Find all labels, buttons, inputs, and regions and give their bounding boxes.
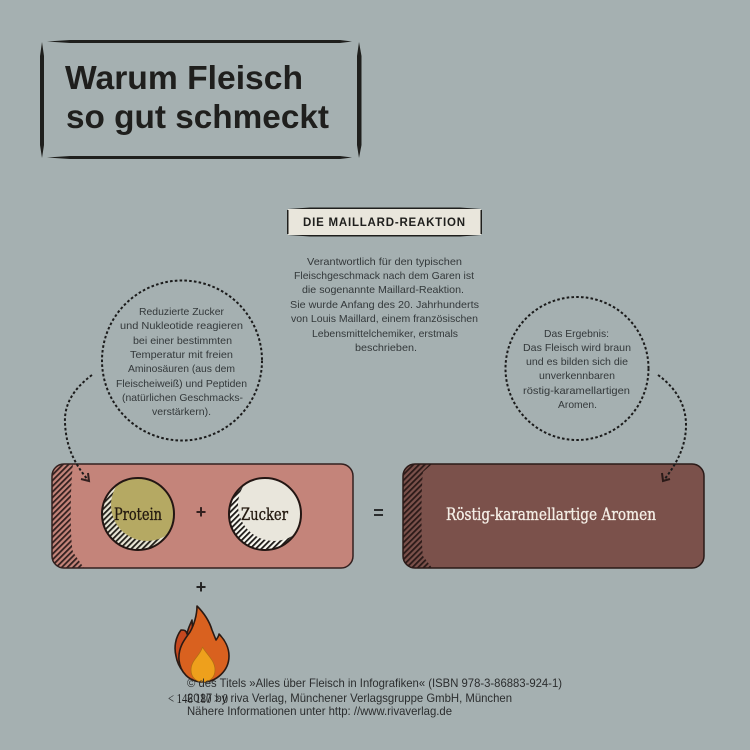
intro text block: Verantwortlich für den typischen: [307, 256, 462, 268]
intro text block: beschrieben.: [355, 342, 417, 354]
copyright footer: © des Titels »Alles über Fleisch in Infografiken« (ISBN 978-3-86883-924-1): [187, 676, 562, 690]
callout circle: Maillard explanation: Fleischeiweiß) und Peptiden: [116, 378, 247, 390]
ingredient: Protein: [101, 477, 175, 551]
intro text block: die sogenannte Maillard-Reaktion.: [302, 284, 464, 296]
equals sign: =: [373, 503, 384, 523]
title: Warum Fleisch: [65, 59, 303, 96]
callout circle: result: Das Ergebnis:: [544, 328, 609, 340]
intro text block: Fleischgeschmack nach dem Garen ist: [294, 270, 474, 282]
callout circle: Maillard explanation: Temperatur mit freien: [130, 349, 233, 361]
arrow: callout to ingredients: [65, 375, 92, 481]
plus sign above flame: +: [196, 577, 206, 597]
ingredient: Zucker: [228, 477, 302, 551]
callout circle: result: unverkennbaren: [539, 370, 615, 382]
title: so gut schmeckt: [66, 98, 329, 135]
title: [65, 59, 329, 135]
intro text block: von Louis Maillard, einem französischen: [291, 313, 478, 325]
ingredient: Protein: Protein: [114, 505, 162, 525]
callout circle: Maillard explanation: Aminosäuren (aus dem: [128, 363, 235, 375]
callout circle: Maillard explanation: (natürlichen Geschmacks-: [122, 392, 243, 404]
callout circle: Maillard explanation: bei einer bestimmten: [133, 335, 232, 347]
copyright footer: < 146 180 > 0: [168, 692, 228, 707]
callout circle: Maillard explanation: und Nukleotide reagieren: [120, 320, 243, 332]
panel: ingredients: [52, 464, 353, 568]
intro text block: [290, 256, 479, 354]
title frame: [40, 40, 362, 159]
plus sign: +: [196, 502, 206, 522]
copyright footer: [168, 676, 562, 718]
callout circle: Maillard explanation: [102, 280, 262, 440]
copyright footer: Nähere Informationen unter http: //www.rivaverlag.de: [187, 704, 452, 718]
icon: flame: [175, 606, 229, 682]
callout circle: result: röstig-karamellartigen: [523, 385, 630, 397]
heading label: Die Maillard-Reaktion: DIE MAILLARD-REAKTION: [303, 217, 465, 229]
callout circle: result: Das Fleisch wird braun: [523, 342, 631, 354]
heading label: Die Maillard-Reaktion: [287, 208, 482, 236]
callout circle: result: und es bilden sich die: [526, 356, 628, 368]
callout circle: result: [506, 297, 648, 440]
intro text block: Lebensmittelchemiker, erstmals: [312, 328, 458, 340]
arrow: callout to result: [658, 375, 686, 481]
callout circle: Maillard explanation: Reduzierte Zucker: [139, 306, 224, 318]
intro text block: Sie wurde Anfang des 20. Jahrhunderts: [290, 299, 479, 311]
callout circle: Maillard explanation: verstärkern).: [152, 406, 211, 418]
copyright footer: 2017 by riva Verlag, Münchener Verlagsgruppe GmbH, München: [187, 691, 512, 705]
panel: result: [403, 464, 704, 568]
ingredient: Zucker: Zucker: [241, 505, 289, 525]
callout circle: result: Aromen.: [558, 399, 597, 411]
panel: result: Röstig-karamellartige Aromen: [446, 505, 656, 524]
